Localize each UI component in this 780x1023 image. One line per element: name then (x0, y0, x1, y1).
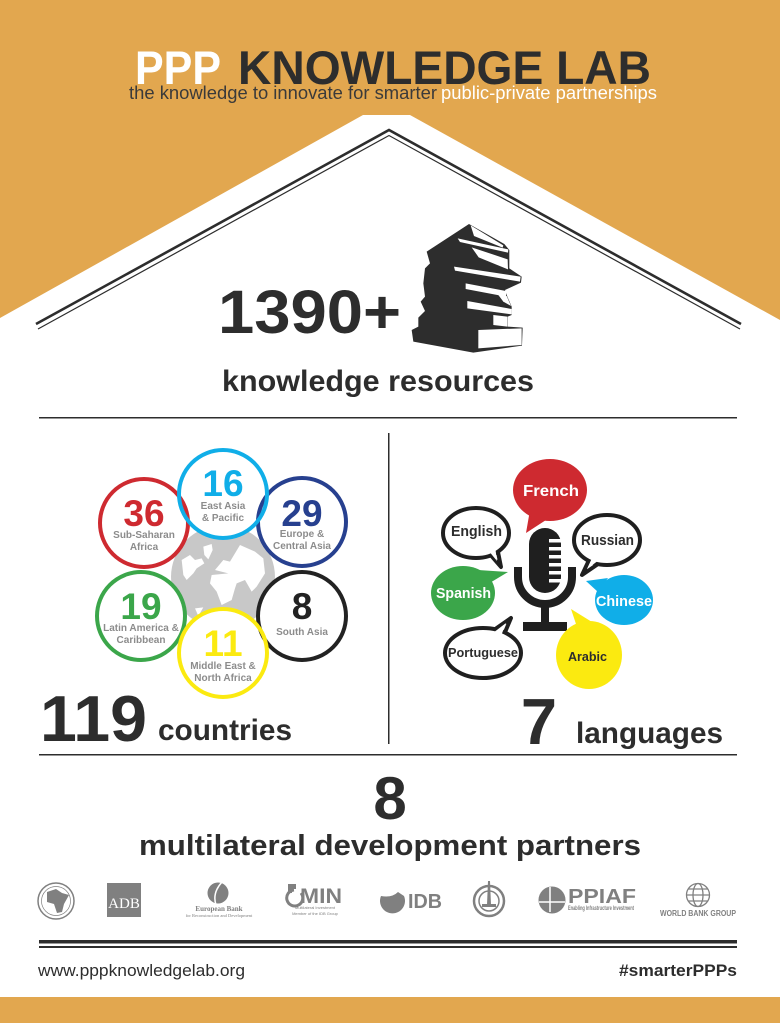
region: Middle East and North Africa: 11 (203, 623, 243, 664)
website: www.pppknowledgelab.org (37, 961, 245, 980)
region: Latin America and Caribbean: 19 (120, 586, 162, 627)
logo: ADB: ADB (108, 896, 140, 912)
logo: PPIAF: PPIAF (568, 886, 636, 908)
bubble: English: English (451, 524, 502, 540)
region: Europe and Central Asia: Central Asia (273, 541, 331, 552)
region: Sub-Saharan Africa: 36 (123, 493, 165, 534)
partners count: 8 (373, 765, 407, 832)
region: Latin America and Caribbean: Caribbean (117, 635, 165, 646)
region: Sub-Saharan Africa: Africa (130, 542, 159, 553)
logo: ADB (107, 883, 141, 917)
logo: European Bank (186, 882, 253, 918)
partner logos (38, 881, 737, 919)
countries total: countries (158, 714, 292, 747)
languages total: 7 (521, 685, 557, 758)
bubble: Portuguese: Portuguese (448, 646, 518, 660)
bubble: Spanish (431, 566, 508, 620)
region: East Asia and Pacific: 16 (202, 463, 244, 504)
bubble: Arabic: Arabic (568, 650, 607, 664)
title: PPP (135, 41, 221, 94)
resources label: knowledge resources (222, 365, 534, 398)
region: Europe and Central Asia: 29 (281, 493, 323, 534)
icon: microphone (518, 528, 572, 631)
logo: African Development Bank (38, 883, 74, 919)
bubble: Russian: Russian (581, 533, 634, 549)
subtitle (129, 83, 657, 103)
region: East Asia and Pacific: & Pacific (202, 513, 245, 524)
bubble: English (443, 508, 509, 567)
countries total (40, 682, 292, 755)
region: South Asia: 8 (292, 586, 312, 627)
logo: MIGA: Member of the IDB Group (292, 911, 339, 916)
logo: European Bank: European Bank (195, 905, 243, 913)
logo: PPIAF: Enabling Infrastructure Investment (568, 906, 634, 912)
partners label: multilateral development partners (139, 830, 641, 862)
region: Latin America and Caribbean (97, 572, 185, 660)
logo: World Bank Group: WORLD BANK GROUP (660, 909, 737, 918)
languages total (521, 685, 723, 758)
header band (0, 0, 780, 320)
panel: countries (40, 450, 346, 755)
title: KNOWLEDGE LAB (238, 41, 651, 94)
logo: PPIAF (538, 886, 636, 914)
region: East Asia and Pacific (179, 450, 267, 538)
bubble: Russian (574, 515, 640, 575)
subtitle: the knowledge to innovate for smarter (129, 83, 437, 103)
languages total: languages (576, 717, 723, 750)
hashtag: #smarterPPPs (619, 961, 737, 980)
logo: MIGA (287, 884, 342, 916)
logo: IDB: IDB (408, 890, 442, 913)
bubble: Portuguese (445, 618, 521, 678)
countries total: 119 (40, 682, 147, 755)
icon: stack of books (412, 224, 523, 353)
logo: IDB (380, 890, 442, 913)
bubble: Arabic (556, 609, 622, 689)
bubble: Spanish: Spanish (436, 586, 491, 602)
logo: World Bank Group (660, 884, 737, 918)
region: East Asia and Pacific: East Asia (201, 501, 246, 512)
roof double line (36, 130, 741, 329)
panel: languages (431, 459, 723, 758)
region: Middle East and North Africa (179, 609, 267, 697)
region: Europe and Central Asia: Europe & (280, 529, 324, 540)
subtitle: public-private partnerships (441, 83, 657, 103)
region: Sub-Saharan Africa: Sub-Saharan (113, 530, 175, 541)
region: South Asia: South Asia (276, 627, 328, 638)
logo: European Bank: for Reconstruction and Development (186, 913, 253, 918)
region: Latin America and Caribbean: Latin America & (103, 623, 179, 634)
logo: seal (474, 881, 504, 916)
region: Sub-Saharan Africa (100, 479, 188, 567)
bubble: French: French (523, 483, 579, 500)
region: Middle East and North Africa: North Africa (194, 673, 252, 684)
bubble: Chinese: Chinese (596, 594, 652, 610)
icon: globe (171, 525, 275, 629)
logo: MIGA: MIN (300, 885, 342, 908)
resource count: 1390+ (218, 278, 401, 346)
region: South Asia (258, 572, 346, 660)
bubble: French (513, 459, 587, 533)
region: Middle East and North Africa: Middle East & (190, 661, 256, 672)
logo: MIGA: Multilateral Investment (295, 905, 336, 910)
bubble: Chinese (586, 575, 653, 625)
footer band (0, 997, 780, 1023)
region: Europe and Central Asia (258, 478, 346, 566)
